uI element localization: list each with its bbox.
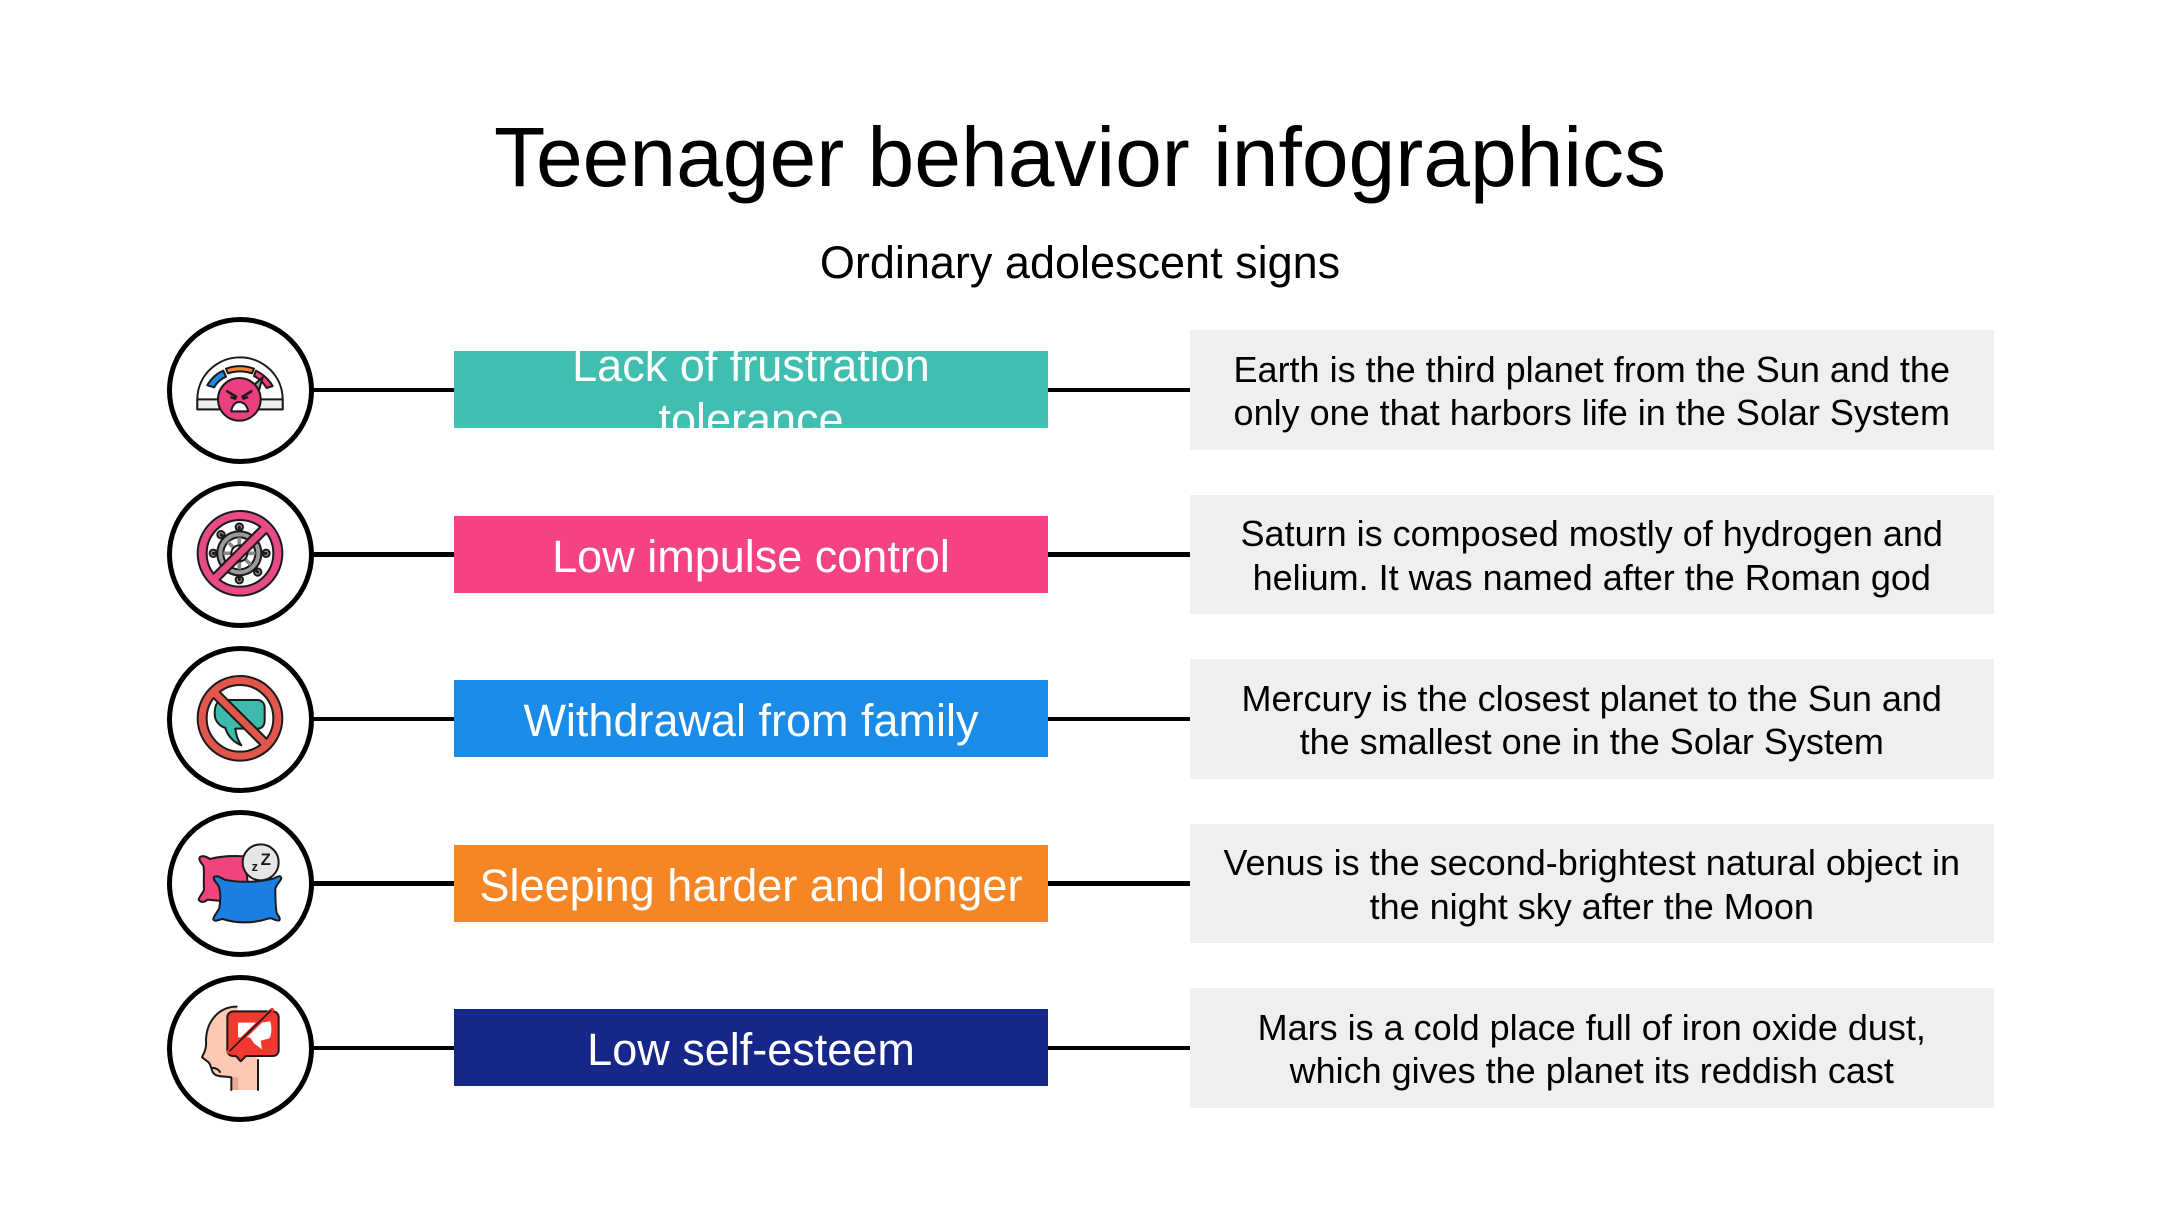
connector line (312, 717, 1193, 721)
category bar (454, 516, 1048, 592)
row 3: withdrawal from family (167, 646, 1994, 793)
description: the night sky after the Moon (1370, 886, 1814, 927)
icon circle (166, 810, 314, 957)
description (1190, 988, 1994, 1108)
connector line (312, 552, 1193, 557)
row 5: low self-esteem (167, 975, 1994, 1122)
description: Mercury is the closest planet to the Sun and (1242, 678, 1942, 719)
icon: head with thumbs down (201, 1006, 280, 1091)
category bar: Withdrawal from family (523, 695, 979, 746)
title: Teenager behavior infographics (494, 110, 1666, 204)
category bar (454, 351, 1048, 428)
description: Saturn is composed mostly of hydrogen and (1241, 513, 1943, 554)
row 4: sleeping harder and longer (167, 810, 1994, 957)
connector line (312, 1046, 1193, 1050)
description (1190, 659, 1994, 778)
icon circle (166, 974, 314, 1122)
category bar (454, 844, 1048, 922)
icon circle (166, 646, 314, 792)
description: only one that harbors life in the Solar System (1234, 392, 1950, 433)
connector line (312, 388, 1193, 392)
icon: prohibited speech bubble (196, 675, 284, 762)
icon circle (166, 316, 314, 464)
description: which gives the planet its reddish cast (1290, 1050, 1894, 1091)
category bar (454, 680, 1048, 757)
row 2: low impulse control (167, 481, 1994, 628)
description: Venus is the second-brightest natural object in (1224, 842, 1960, 883)
category bar: Low impulse control (552, 530, 950, 582)
description (1190, 330, 1994, 450)
row 1: lack of frustration tolerance (167, 317, 1994, 464)
icon: prohibited ship wheel (196, 510, 284, 597)
icon: pillows and sleep bubble: Z (261, 850, 271, 869)
icon: pillows and sleep bubble: z (252, 860, 258, 874)
category bar (454, 1009, 1048, 1086)
description (1190, 824, 1994, 943)
description (1190, 494, 1994, 614)
category bar: Sleeping harder and longer (480, 860, 1022, 910)
description: the smallest one in the Solar System (1300, 721, 1884, 762)
icon: angry gauge (196, 356, 284, 422)
description: Mars is a cold place full of iron oxide dust, (1258, 1007, 1926, 1048)
description: Earth is the third planet from the Sun and the (1234, 349, 1950, 390)
icon circle (166, 481, 314, 628)
connector line (312, 881, 1193, 886)
icon: pillows and sleep bubble (198, 843, 282, 924)
subtitle: Ordinary adolescent signs (820, 237, 1340, 288)
category bar: Low self-esteem (587, 1024, 915, 1075)
description: helium. It was named after the Roman god (1253, 557, 1931, 598)
